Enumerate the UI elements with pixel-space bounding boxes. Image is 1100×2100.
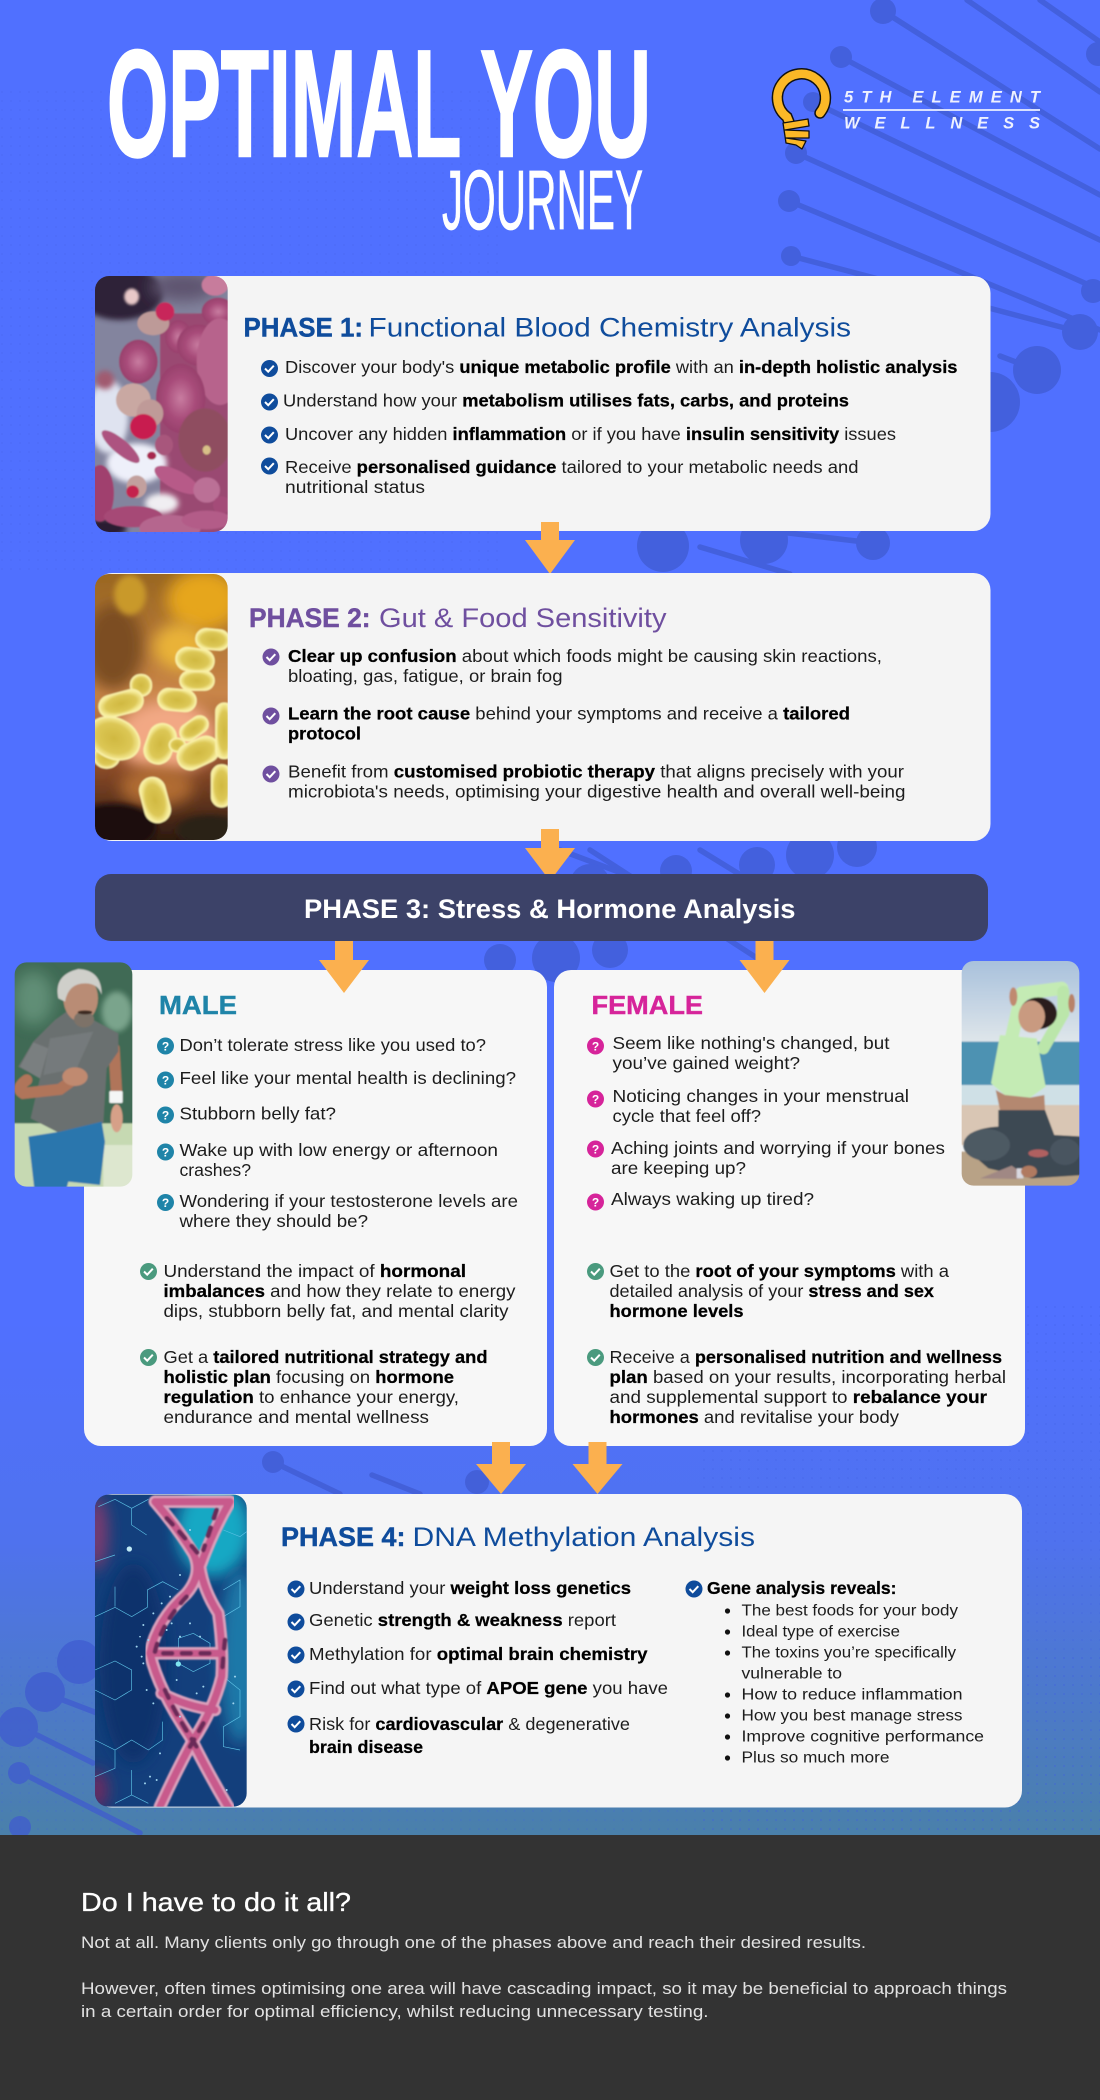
right list: gene analysis: Ideal type of exercise <box>742 1624 900 1640</box>
heading: female: FEMALE <box>592 990 703 1020</box>
male outcome 1 <box>140 1261 516 1321</box>
benefit 3: Uncover any hidden inflammation or if you have insulin sensitivity issues <box>285 424 896 444</box>
logo: 5th Element Wellness <box>777 74 1042 149</box>
logo wordmark <box>843 88 1042 132</box>
question 1 <box>587 1033 890 1073</box>
female outcome 1 <box>587 1261 949 1321</box>
benefit 2: Understand how your metabolism utilises fats, carbs, and proteins <box>283 390 849 410</box>
question 1: ? <box>162 1040 169 1054</box>
right list: gene analysis: Plus so much more <box>742 1750 890 1766</box>
footer paragraph 1: Not at all. Many clients only go through one of the phases above and reach their desired results. <box>81 1934 866 1952</box>
male outcome 2 <box>140 1347 488 1427</box>
panel: phase 3 banner <box>95 874 988 941</box>
right list: gene analysis: The toxins you’re specifically <box>742 1644 956 1662</box>
right list: gene analysis: Improve cognitive performance <box>742 1728 984 1746</box>
image: male runner <box>14 962 132 1187</box>
heading: PHASE 2: <box>249 603 370 633</box>
benefit 5: Risk for cardiovascular & degenerative <box>309 1714 630 1734</box>
male outcome 1: dips, stubborn belly fat, and mental clarity <box>164 1301 509 1321</box>
question 4: ? <box>162 1146 169 1160</box>
question 2 <box>587 1086 909 1126</box>
heading: PHASE 1: <box>244 312 363 342</box>
female outcome 2: Receive a personalised nutrition and wellness <box>610 1347 1002 1367</box>
panel: female <box>554 955 1088 1446</box>
heading: Functional Blood Chemistry Analysis <box>368 312 851 342</box>
heading: Gut & Food Sensitivity <box>379 603 667 633</box>
question 1: you’ve gained weight? <box>612 1053 800 1073</box>
image: female stretching <box>962 961 1080 1186</box>
question 2: cycle that feel off? <box>612 1106 761 1126</box>
benefit 2: protocol <box>288 724 361 744</box>
question 2: ? <box>162 1074 169 1088</box>
question 3: Stubborn belly fat? <box>180 1104 336 1124</box>
male outcome 2: regulation to enhance your energy, <box>164 1387 459 1407</box>
benefit 2: Genetic strength & weakness report <box>309 1610 616 1630</box>
logo wordmark: 5TH ELEMENT <box>844 88 1042 106</box>
panel: male <box>7 955 547 1446</box>
female outcome 2: plan based on your results, incorporating herbal <box>610 1367 1006 1387</box>
benefit 1 <box>262 646 882 686</box>
arrow: phase 3 to female <box>740 941 790 993</box>
question 3: ? <box>592 1142 599 1156</box>
heading <box>249 603 667 633</box>
right list: gene analysis <box>686 1578 984 1766</box>
question 4: ? <box>592 1196 599 1210</box>
image: blood cells <box>95 276 228 532</box>
male outcome 2: holistic plan focusing on hormone <box>164 1367 454 1387</box>
heading: PHASE 4: <box>281 1522 406 1552</box>
heading <box>281 1522 755 1552</box>
question 5 <box>157 1191 518 1231</box>
question 3: are keeping up? <box>611 1158 746 1178</box>
male outcome 2: endurance and mental wellness <box>164 1407 429 1427</box>
question 3 <box>587 1138 945 1178</box>
icon: light bulb <box>777 74 825 149</box>
male outcome 1: imbalances and how they relate to energy <box>164 1281 516 1301</box>
female outcome 1: hormone levels <box>610 1301 744 1321</box>
benefit 1: Understand your weight loss genetics <box>309 1578 631 1598</box>
question 4: Wake up with low energy or afternoon <box>180 1140 498 1160</box>
question 4: crashes? <box>180 1160 251 1180</box>
benefit 5 <box>288 1714 630 1757</box>
benefit 3: microbiota's needs, optimising your digestive health and overall well-being <box>288 782 906 802</box>
benefit 2 <box>262 704 850 744</box>
female outcome 2: hormones and revitalise your body <box>610 1407 899 1427</box>
benefit 1: Discover your body's unique metabolic profile with an in-depth holistic analysis <box>285 357 958 377</box>
logo wordmark: WELLNESS <box>844 114 1040 132</box>
arrow: male to phase 4 <box>476 1442 526 1494</box>
male outcome 2: Get a tailored nutritional strategy and <box>164 1347 488 1367</box>
question 2: Noticing changes in your menstrual <box>612 1086 909 1106</box>
image: gut bacteria <box>95 574 228 840</box>
right list: gene analysis: How to reduce inflammation <box>742 1686 962 1704</box>
arrow: female to phase 4 <box>572 1442 622 1494</box>
panel: phase 1 <box>77 267 990 542</box>
arrow: phase 2 to phase 3 <box>525 829 575 881</box>
benefit 3 <box>262 762 906 802</box>
question 3: Aching joints and worrying if your bones <box>611 1138 945 1158</box>
panel: phase 2 <box>70 567 991 850</box>
question 4: Always waking up tired? <box>611 1189 814 1209</box>
panel: footer <box>0 1835 1100 2100</box>
question 2: ? <box>592 1092 599 1106</box>
benefit 3: Benefit from customised probiotic therapy that aligns precisely with your <box>288 762 904 782</box>
benefit 5: brain disease <box>309 1737 423 1757</box>
question 5: ? <box>162 1196 169 1210</box>
question 5: Wondering if your testosterone levels are <box>180 1191 518 1211</box>
question 4 <box>157 1140 498 1180</box>
question 5: where they should be? <box>178 1211 368 1231</box>
benefit 4: Find out what type of APOE gene you have <box>309 1678 668 1698</box>
question 1: Seem like nothing's changed, but <box>612 1033 890 1053</box>
question 1: Don’t tolerate stress like you used to? <box>180 1035 486 1055</box>
question 2: Feel like your mental health is declining? <box>180 1068 516 1088</box>
question 3: ? <box>162 1108 169 1122</box>
subtitle: Journey: JOURNEY <box>442 153 643 247</box>
female outcome 1: Get to the root of your symptoms with a <box>610 1261 949 1281</box>
panel: phase 4 <box>85 1483 1022 1813</box>
benefit 4: nutritional status <box>285 477 425 497</box>
benefit 3: Methylation for optimal brain chemistry <box>309 1644 648 1664</box>
benefit 4: Receive personalised guidance tailored to your metabolic needs and <box>285 457 858 477</box>
footer paragraph 2 <box>81 1980 1007 2021</box>
female outcome 1: detailed analysis of your stress and sex <box>610 1281 934 1301</box>
right list: gene analysis: Gene analysis reveals: <box>707 1578 896 1598</box>
benefit 2: Learn the root cause behind your symptoms and receive a tailored <box>288 704 850 724</box>
benefit 4 <box>261 457 858 497</box>
right list: gene analysis: How you best manage stress <box>742 1708 963 1724</box>
arrow: phase 3 to male <box>319 941 369 993</box>
heading: DNA Methylation Analysis <box>412 1522 755 1552</box>
female outcome 2 <box>587 1347 1006 1427</box>
question 1: ? <box>592 1040 599 1054</box>
image: DNA helix <box>95 1494 247 1807</box>
footer paragraph 2: in a certain order for optimal efficiency, whilst reducing unnecessary testing. <box>81 2003 708 2021</box>
female outcome 2: and supplemental support to rebalance your <box>610 1387 987 1407</box>
benefit 1: Clear up confusion about which foods might be causing skin reactions, <box>288 646 882 666</box>
heading: male: MALE <box>159 990 237 1020</box>
right list: gene analysis: vulnerable to <box>742 1666 842 1682</box>
footer heading: Do I have to do it all? <box>81 1887 351 1917</box>
right list: gene analysis: The best foods for your body <box>742 1602 958 1620</box>
arrow: phase 1 to phase 2 <box>525 522 575 574</box>
footer paragraph 2: However, often times optimising one area will have cascading impact, so it may be beneficial to approach things <box>81 1980 1007 1998</box>
left list <box>288 1578 668 1757</box>
benefit 1: bloating, gas, fatigue, or brain fog <box>288 666 562 686</box>
male outcome 1: Understand the impact of hormonal <box>164 1261 466 1281</box>
heading: PHASE 3: Stress & Hormone Analysis <box>304 894 796 924</box>
